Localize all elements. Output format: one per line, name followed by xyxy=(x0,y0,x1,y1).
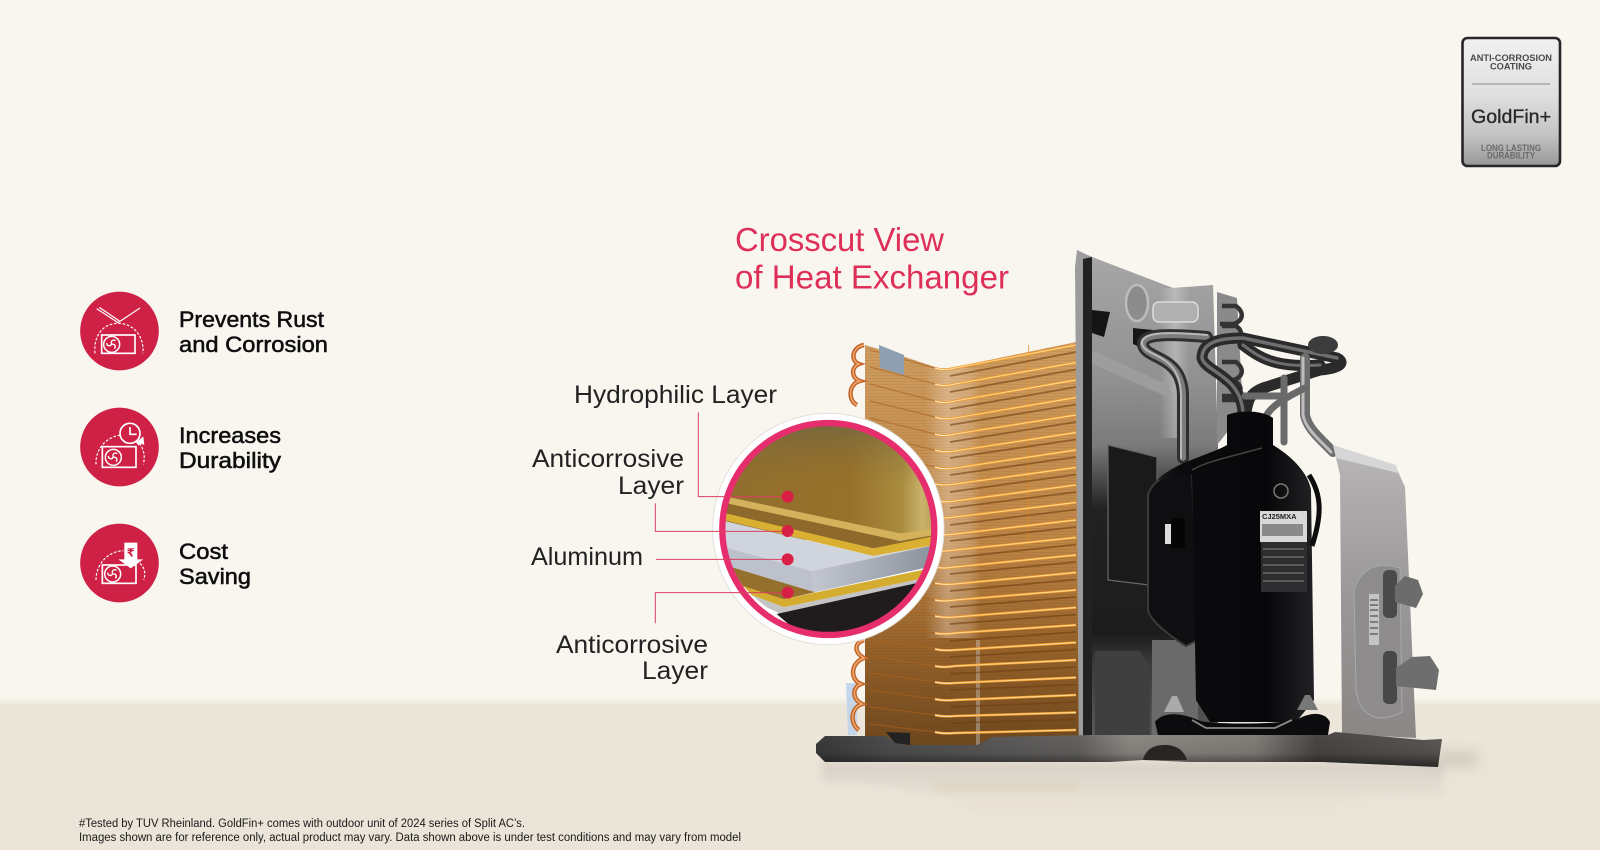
label: Cost xyxy=(179,539,229,564)
callout label: upper anticorrosive layer xyxy=(532,445,684,500)
coil tubes, right face xyxy=(935,345,1076,733)
coil tube shadows xyxy=(950,352,1076,723)
label: Prevents Rust xyxy=(179,307,325,332)
title: crosscut view of heat exchanger: of Heat Exchanger xyxy=(735,260,1009,296)
hydrophilic layer edge xyxy=(723,496,935,541)
label: Saving xyxy=(179,564,251,589)
label xyxy=(179,423,282,473)
floor xyxy=(0,697,1600,850)
panel slot xyxy=(1153,302,1198,322)
anticorrosive layer top xyxy=(723,503,935,548)
callout label: upper anticorrosive layer: Anticorrosive xyxy=(532,445,684,473)
coil fold highlight xyxy=(925,368,981,638)
floor reflection xyxy=(820,762,1444,825)
callout label: lower anticorrosive layer xyxy=(556,631,708,685)
benefit: prevents rust and corrosion xyxy=(80,292,328,370)
badge: GoldFin+ anti-corrosion coating: GoldFin+ xyxy=(1471,107,1551,128)
accumulator xyxy=(1148,468,1198,646)
pipe: discharge loop xyxy=(1202,338,1341,412)
label: Durability xyxy=(179,448,282,473)
compressor nameplate xyxy=(1260,511,1307,592)
icon: cost saving rupee arrow: ₹ xyxy=(127,546,135,560)
badge: GoldFin+ anti-corrosion coating: COATING xyxy=(1490,62,1532,72)
heat exchanger coil xyxy=(846,342,1079,748)
lens white bezel xyxy=(713,413,944,645)
coil mounting bracket xyxy=(846,683,857,735)
label: Increases xyxy=(179,423,281,448)
outdoor unit cutaway illustration xyxy=(816,250,1478,825)
badge: GoldFin+ anti-corrosion coating: ANTI-CORROSION xyxy=(1470,53,1552,63)
panel brackets xyxy=(1092,310,1110,337)
rear coil bends xyxy=(1217,292,1243,445)
badge: GoldFin+ anti-corrosion coating: DURABILITY xyxy=(1487,150,1535,160)
compressor nameplate: CJ25MXA xyxy=(1262,512,1297,521)
footnote: Images shown are for reference only, actual product may vary. Data shown above is under test conditions and may vary from model xyxy=(79,832,741,844)
label: and Corrosion xyxy=(179,332,328,357)
coil mounting tab xyxy=(879,345,904,375)
compressor xyxy=(1148,412,1330,735)
coil tubes, left face xyxy=(870,350,935,732)
panel knockout xyxy=(1126,285,1148,321)
badge: GoldFin+ anti-corrosion coating: LONG LASTING xyxy=(1481,143,1541,153)
base tray xyxy=(816,732,1442,767)
valve: upper xyxy=(1383,570,1423,618)
label xyxy=(179,307,328,357)
callout lines xyxy=(655,412,788,623)
footnote: #Tested by TUV Rheinland. GoldFin+ comes with outdoor unit of 2024 series of Split AC’s. xyxy=(79,818,525,830)
callout dots xyxy=(782,491,794,599)
lower anticorrosive layer xyxy=(730,567,815,599)
title: crosscut view of heat exchanger xyxy=(735,222,1009,296)
callout label: upper anticorrosive layer: Layer xyxy=(618,472,684,500)
callout label: aluminum: Aluminum xyxy=(531,543,643,571)
panel lower recess xyxy=(1095,651,1150,738)
compressor strap xyxy=(1309,475,1319,546)
coil return bends xyxy=(851,345,864,730)
icon: cost saving rupee arrow xyxy=(80,524,159,602)
pipe end cap xyxy=(1308,336,1338,354)
label xyxy=(179,539,251,589)
tray shadow on floor xyxy=(1436,752,1478,766)
benefit: increases durability xyxy=(80,408,282,486)
callout label: hydrophilic layer: Hydrophilic Layer xyxy=(574,381,777,409)
lens layers xyxy=(720,420,937,637)
valve: lower xyxy=(1383,651,1439,704)
refrigerant pipes xyxy=(1142,333,1341,458)
service valve panel xyxy=(1333,445,1439,738)
aluminum core xyxy=(723,521,933,571)
pipe: service line xyxy=(1305,358,1333,452)
compressor mounts xyxy=(1155,714,1330,735)
lens pink ring xyxy=(722,423,934,635)
callout label: lower anticorrosive layer: Layer xyxy=(642,657,708,685)
icon: durability clock xyxy=(80,408,159,486)
badge: GoldFin+ anti-corrosion coating xyxy=(1462,38,1560,166)
benefit: cost saving xyxy=(80,524,251,602)
compressor body xyxy=(1157,412,1314,722)
pipe: suction loop xyxy=(1142,333,1207,458)
pipe: rear struts xyxy=(1245,378,1305,442)
tray clip xyxy=(886,732,910,745)
magnified crosscut lens xyxy=(655,412,944,645)
title: crosscut view of heat exchanger: Crosscut View xyxy=(735,222,945,259)
icon: rust and corrosion shield xyxy=(80,292,159,370)
tray arch xyxy=(1143,745,1187,760)
back panel xyxy=(1075,250,1243,745)
panel window recess xyxy=(1108,445,1157,586)
footnote xyxy=(79,818,741,844)
callout label: lower anticorrosive layer: Anticorrosive xyxy=(556,631,708,659)
